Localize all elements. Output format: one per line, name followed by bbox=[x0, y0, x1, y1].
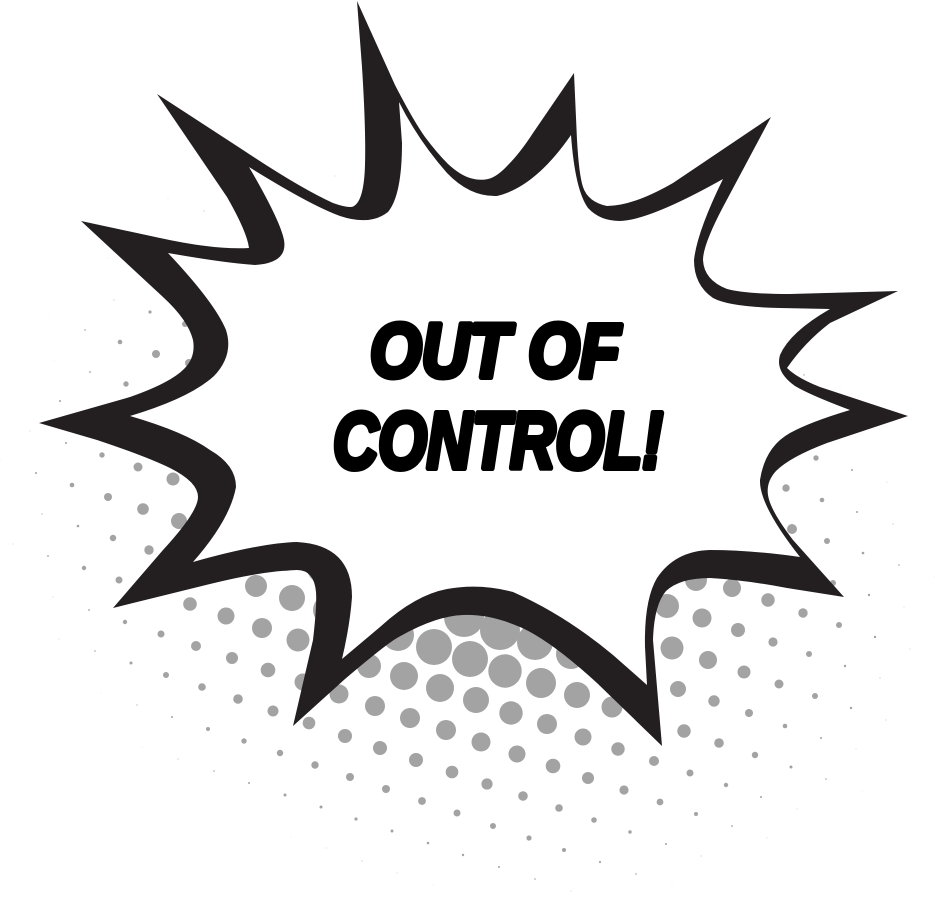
headline line 2: CONTROL! bbox=[333, 396, 663, 485]
halftone dot background bbox=[0, 164, 934, 891]
headline line 1: OUT OF bbox=[370, 309, 622, 394]
burst: black outer shape bbox=[39, 1, 908, 746]
comic explosion speech burst bbox=[39, 1, 908, 746]
headline text: OUT OF CONTROL! bbox=[333, 309, 663, 485]
burst: white interior bbox=[130, 102, 850, 685]
